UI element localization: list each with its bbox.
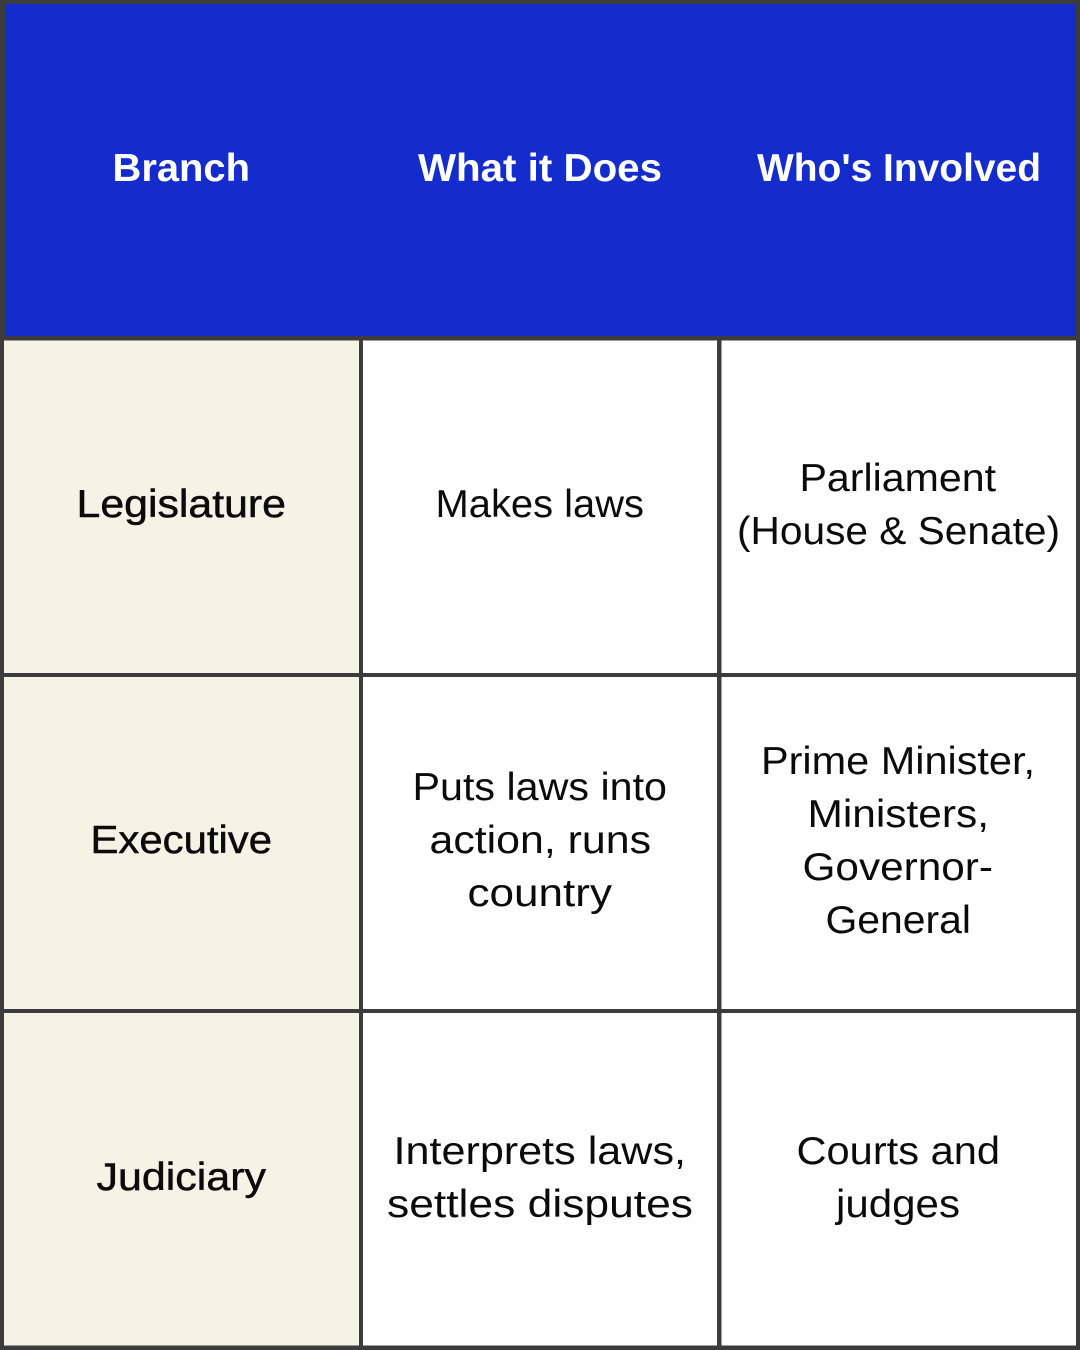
who's involved cell: Parliament: (House & Senate) [737,510,1060,553]
what it does cell: Puts laws into action: country [468,872,613,915]
what it does cell: Puts laws into action [363,677,717,1009]
what it does cell: Puts laws into action: Puts laws into [412,766,667,809]
what it does cell: Makes laws [363,340,717,673]
row: Legislature [4,340,1076,673]
branch cell: Judiciary: Judiciary [96,1156,267,1199]
who's involved cell: Prime Minister [722,677,1076,1009]
header: Who's Involved: Who's Involved [757,147,1041,190]
what it does cell: Interprets laws: Interprets laws, [394,1130,686,1173]
row: Executive [4,677,1076,1009]
header: Branch: Branch [112,147,250,190]
branch cell: Judiciary [4,1013,359,1346]
who's involved cell: Parliament [722,340,1076,673]
header: What it Does: What it Does [418,147,662,190]
branch cell: Legislature: Legislature [76,483,286,526]
branch cell: Executive [4,677,359,1009]
who's involved cell: Parliament: Parliament [800,457,996,500]
who's involved cell: Courts and judges: judges [835,1183,960,1226]
what it does cell: Puts laws into action: action, runs [430,819,651,862]
row: Judiciary [4,1013,1076,1346]
who's involved cell: Prime Minister: Governor- [802,846,993,889]
what it does cell: Interprets laws: settles disputes [387,1183,693,1226]
who's involved cell: Prime Minister: Ministers, [808,793,989,836]
what it does cell: Interprets laws [363,1013,717,1346]
who's involved cell: Courts and judges: Courts and [796,1130,1000,1173]
who's involved cell: Prime Minister: General [826,899,971,942]
branch cell: Executive: Executive [90,819,272,862]
what it does cell: Makes laws: Makes laws [436,483,644,526]
who's involved cell: Courts and judges [722,1013,1076,1346]
table header row [5,4,1076,336]
who's involved cell: Prime Minister: Prime Minister, [761,740,1035,783]
branch cell: Legislature [4,340,359,673]
